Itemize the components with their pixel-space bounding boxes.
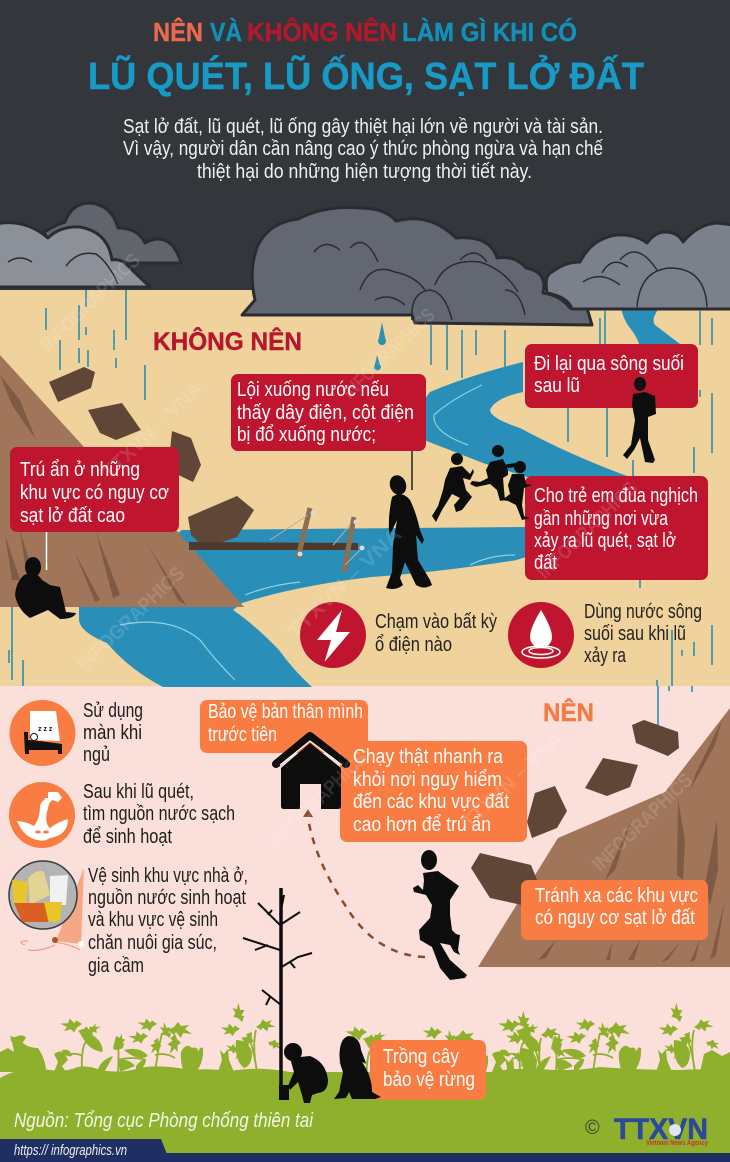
callout: lội xuống nước: thấy dây điện, cột điện [237,402,414,424]
watermarks [36,249,697,876]
callout: tránh xa: Tránh xa các khu vực [535,885,698,907]
watermarks: TTXVN – VNA [458,727,567,834]
callout: trẻ em: xảy ra lũ quét, sạt lở [534,530,676,552]
fallen power pole [189,508,364,572]
intro text: thiệt hại do những hiện tượng thời tiết này. [197,161,532,183]
icon: faucet and hands [9,782,75,848]
background: sand panel [0,290,730,686]
callout: trẻ em: gần những nơi vừa [534,508,669,530]
intro text: Vì vậy, người dân cần nâng cao ý thức phòng ngừa và hạn chế [123,138,603,160]
watermarks: INFOGRAPHICS [73,563,189,676]
callout: trẻ em: đất [534,552,557,574]
silhouette: hiker [623,377,656,463]
callout: trẻ em [525,476,708,580]
callout: đi lại [525,344,698,408]
callout: chạy nhanh: Chạy thật nhanh ra [353,746,504,768]
text: sử dụng màn: ngủ [83,744,110,766]
clouds [0,203,730,325]
text: vệ sinh [88,865,248,977]
silhouette: child kneeling [334,1036,381,1099]
text: nguồn nước sạch: để sinh hoạt [83,826,172,848]
callout: bảo vệ bản thân: Bảo vệ bản thân mình [208,701,363,723]
title [88,17,644,98]
icon: mosquito net: z z z [38,726,53,733]
river [79,362,627,687]
watermarks: INFOGRAPHICS [533,477,642,584]
mountain: right [478,708,730,967]
ground plants [0,1002,730,1080]
watermarks: INFOGRAPHICS [588,769,697,876]
callout: đi lại: sau lũ [534,375,580,397]
intro text: Sạt lở đất, lũ quét, lũ ống gây thiệt hại lớn về người và tài sản. [123,116,603,138]
icon: mosquito net [10,700,76,766]
heading: không nên: KHÔNG NÊN [153,326,302,356]
text: vệ sinh: gia cầm [88,955,144,977]
tree pot [279,1085,289,1100]
text: vệ sinh: chăn nuôi gia súc, [88,932,217,954]
callout: bảo vệ bản thân [200,700,368,753]
callout: trồng cây [370,1040,486,1100]
text: nguồn nước sạch [83,781,235,848]
silhouette: child planting [284,1043,328,1103]
callout: trồng cây: bảo vệ rừng [383,1069,475,1091]
callout: tránh xa: có nguy cơ sạt lở đất [535,907,695,929]
text: dùng nước: xảy ra [584,645,627,667]
text: vệ sinh: nguồn nước sinh hoạt [88,887,246,909]
arrow: dashed route [303,809,425,957]
text: sử dụng màn: Sử dụng [83,700,143,722]
callout: chạy nhanh: đến các khu vực đất [353,791,509,813]
icon: house [276,736,346,809]
title: LŨ QUÉT, LŨ ỐNG, SẠT LỞ ĐẤT [88,53,644,98]
callout: trú ẩn: sạt lở đất cao [20,505,125,527]
watermarks: INFOGRAPHICS [36,249,145,356]
callout: lội xuống nước: bị đổ xuống nước; [237,424,376,446]
source text: Nguồn: Tổng cục Phòng chống thiên tai [14,1110,313,1132]
heading: nên: NÊN [543,697,594,727]
text: sử dụng màn [83,700,143,766]
watermarks: INFOGRAPHICS [338,304,440,404]
text: dùng nước: Dùng nước sông [584,601,702,623]
logo: TTXVN: Vietnam News Agency [646,1140,708,1147]
callout: trú ẩn: Trú ẩn ở những [20,459,140,481]
river: upper [621,305,680,346]
footer bar [0,1153,730,1162]
tree [243,888,312,1088]
silhouette: runner [413,850,467,980]
connector: lội [411,451,413,490]
silhouette: standing man [386,473,432,589]
text: sử dụng màn: màn khi [83,722,142,744]
watermarks: INFOGRAPHICS [263,747,372,854]
title: VÀ [210,17,242,47]
mountain: left [0,355,244,607]
callout: trú ẩn: khu vực có nguy cơ [20,482,169,504]
silhouette: sitting man [15,557,76,619]
icon: lightning [300,602,366,668]
icon: water drop [508,602,574,668]
callout: đi lại: Đi lại qua sông suối [534,353,684,375]
icon: cleaning supplies [9,861,84,950]
text: dùng nước [584,601,702,667]
ground [0,1066,730,1162]
footer url tab: https:// infographics.vn [14,1142,127,1159]
callout: tránh xa [521,880,708,940]
callout: chạy nhanh [340,741,527,842]
text: dùng nước: suối sau khi lũ [584,623,686,645]
rain [9,290,712,725]
text: vệ sinh: và khu vực vệ sinh [88,909,218,931]
watermarks: TTXVN – VNA [283,524,406,644]
text: chạm vào: Chạm vào bất kỳ [375,611,497,633]
text: chạm vào [375,611,497,656]
intro text [123,116,603,183]
title: KHÔNG NÊN [247,17,397,47]
callout: bảo vệ bản thân: trước tiên [208,724,277,746]
text: vệ sinh: Vệ sinh khu vực nhà ở, [88,865,248,887]
logo: TTXVN: © [585,1117,600,1139]
text: chạm vào: ổ điện nào [375,634,452,656]
text: nguồn nước sạch: Sau khi lũ quét, [83,781,194,803]
background: dark header [0,0,730,290]
water drops [374,322,386,370]
rocks: right [471,720,679,905]
callout: trồng cây: Trồng cây [383,1046,459,1068]
footer url tab [0,1139,170,1162]
title: LÀM GÌ KHI CÓ [402,17,577,47]
callout: trú ẩn [10,447,179,532]
title: NÊN [153,17,203,47]
background: pink panel [0,686,730,1086]
watermarks: TTXVN – VNA [98,377,207,484]
callout: lội xuống nước: Lội xuống nước nếu [237,379,389,401]
callout: chạy nhanh: khỏi nơi nguy hiểm [353,769,502,791]
callout: chạy nhanh: cao hơn để trú ẩn [353,814,491,836]
silhouette: running children [432,445,532,522]
text: nguồn nước sạch: tìm nguồn nước sạch [83,803,235,825]
logo: TTXVN: TTXVN [614,1113,708,1146]
rocks: left [49,367,254,548]
connector: sitting man [46,532,48,570]
callout: lội xuống nước [231,374,426,451]
